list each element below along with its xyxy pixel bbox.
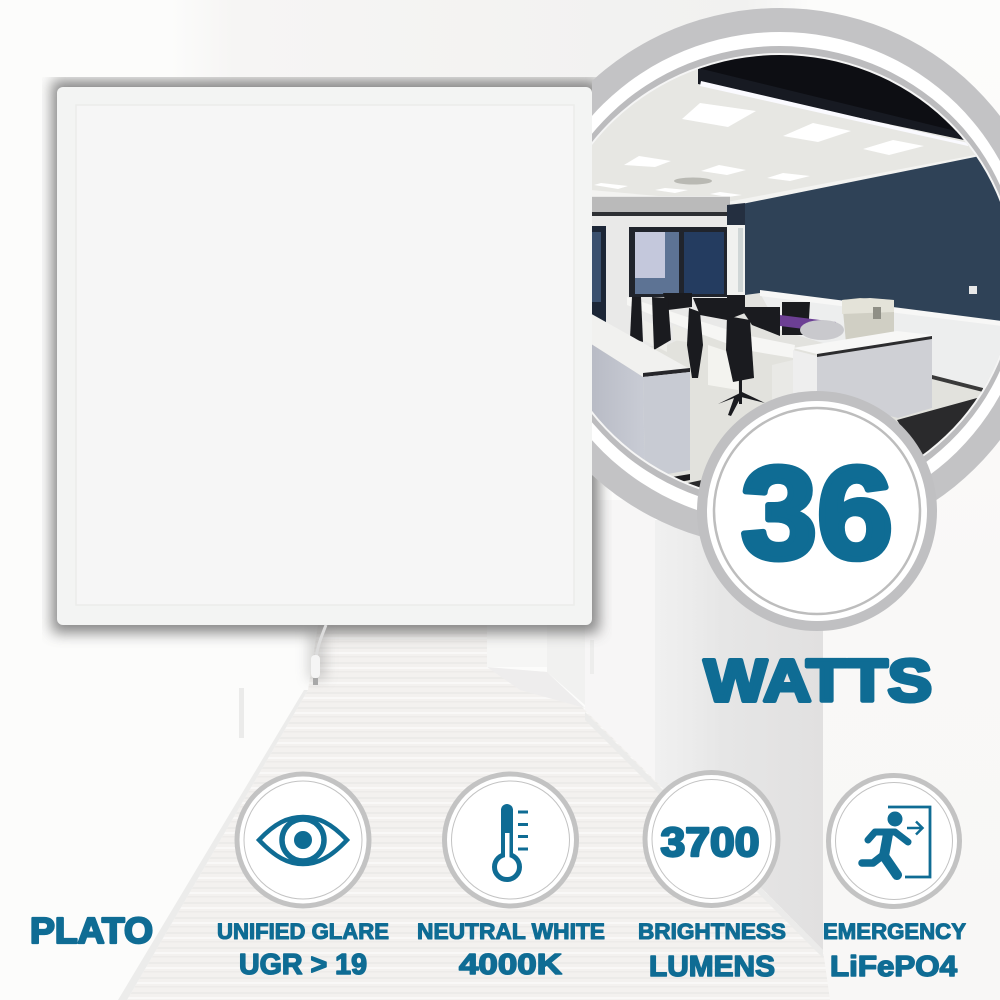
product name: PLATO: [30, 910, 153, 951]
feature: emergency: [823, 773, 966, 983]
panel shadow: [52, 80, 599, 633]
value: 4000K: 4000K: [459, 949, 562, 981]
label: unified glare: UNIFIED GLARE: [217, 919, 389, 944]
label: emergency: EMERGENCY: [823, 919, 966, 944]
LED ceiling panel: [57, 87, 592, 625]
icon: thermometer: [442, 772, 579, 908]
icon: 3700 badge: [642, 770, 780, 908]
wattage badge: [697, 391, 937, 631]
icon: eye: [234, 772, 372, 908]
cable shadow: [308, 625, 326, 680]
icon: 3700 badge: 3700: [660, 819, 760, 865]
power cable: [311, 625, 326, 685]
label: brightness: BRIGHTNESS: [638, 919, 786, 944]
wattage number: 36: [741, 439, 893, 586]
wattage unit: WATTS: [704, 648, 932, 714]
value: UGR: UGR > 19: [239, 949, 367, 981]
feature: colour temperature: [417, 772, 605, 981]
feature: brightness: [638, 770, 786, 983]
value: LiFePO4: LiFePO4: [830, 951, 957, 983]
feature: glare: [217, 772, 389, 981]
label: neutral white: NEUTRAL WHITE: [417, 919, 605, 944]
icon: running exit: [826, 773, 962, 909]
circular photo frame rings: [592, 8, 1000, 536]
value: lumens: LUMENS: [649, 951, 775, 983]
photo: modern office with LED panels: [592, 55, 1000, 488]
